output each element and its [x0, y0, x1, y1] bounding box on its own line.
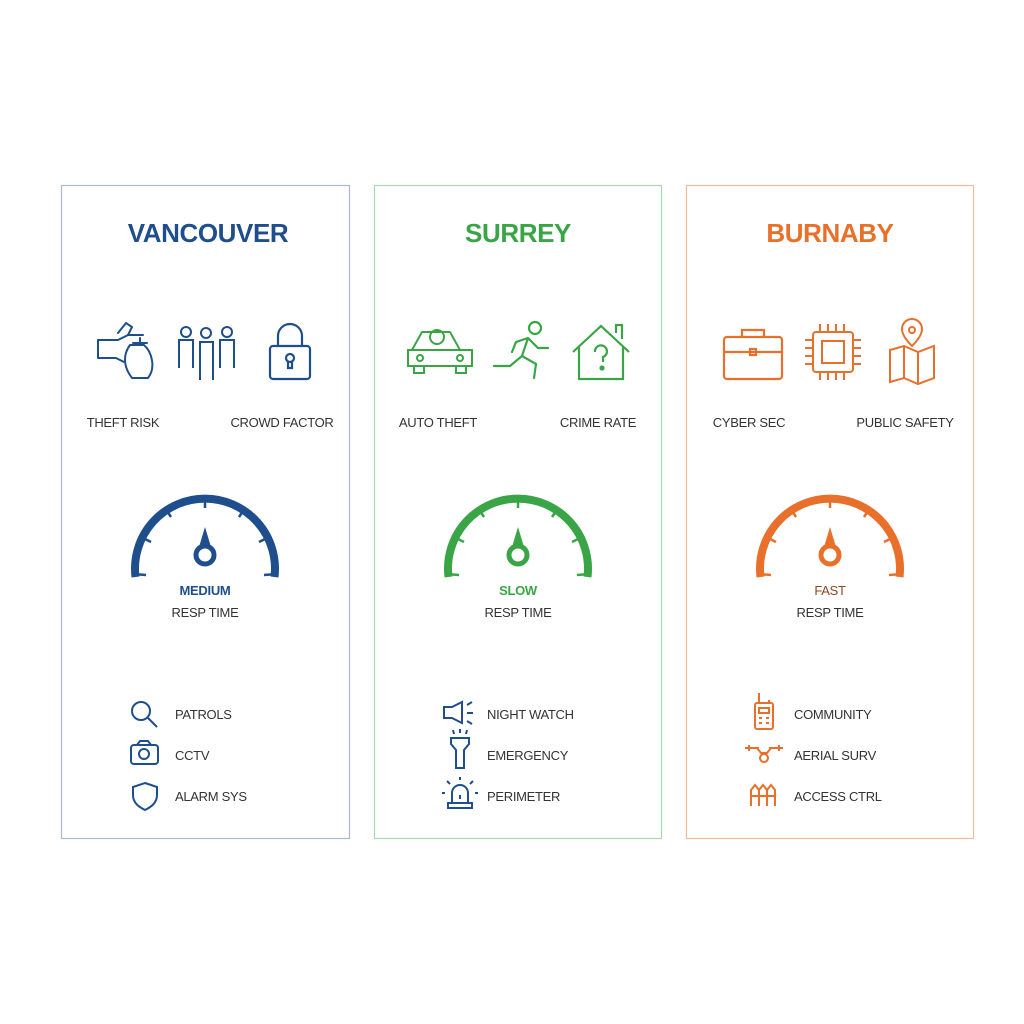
label: cyber sec: CYBER SEC — [713, 415, 785, 430]
gauge: slow — [446, 497, 590, 620]
gauge: fast: RESP TIME — [797, 605, 864, 620]
icon: briefcase — [724, 330, 782, 379]
list: vancouver measures: PATROLS — [175, 707, 232, 722]
icon: running person — [494, 322, 548, 378]
panel: vancouver — [62, 186, 350, 838]
list: burnaby measures: COMMUNITY — [794, 707, 872, 722]
title: surrey: SURREY — [465, 218, 571, 248]
icon: crowd — [179, 327, 234, 380]
list: surrey measures: EMERGENCY — [487, 748, 569, 763]
label: theft risk: THEFT RISK — [87, 415, 160, 430]
gauge: slow: SLOW — [499, 583, 538, 598]
label: crime rate: CRIME RATE — [560, 415, 637, 430]
panel: burnaby — [686, 186, 974, 838]
list: burnaby measures: AERIAL SURV — [794, 748, 877, 763]
gauge: medium: RESP TIME — [172, 605, 239, 620]
list: burnaby measures — [745, 693, 882, 806]
label: auto theft: AUTO THEFT — [399, 415, 477, 430]
icon: chip — [805, 324, 861, 380]
gauge: fast: FAST — [814, 583, 846, 598]
list: surrey measures: PERIMETER — [487, 789, 560, 804]
title: vancouver: VANCOUVER — [128, 218, 289, 248]
icon: map pin — [890, 319, 934, 384]
list: vancouver measures — [131, 702, 247, 810]
list: vancouver measures: ALARM SYS — [175, 789, 247, 804]
icon: padlock — [270, 324, 310, 379]
gauge: fast — [758, 497, 902, 620]
panel: surrey — [374, 186, 662, 838]
gauge: medium — [133, 497, 277, 620]
list: surrey measures: NIGHT WATCH — [487, 707, 574, 722]
icon: theft hand with bag — [98, 323, 152, 378]
list: burnaby measures: ACCESS CTRL — [794, 789, 882, 804]
icon: house question — [573, 325, 629, 379]
gauge: medium: MEDIUM — [180, 583, 230, 598]
list: surrey measures — [442, 702, 574, 808]
label: public safety: PUBLIC SAFETY — [856, 415, 954, 430]
title: burnaby: BURNABY — [766, 218, 894, 248]
label: crowd factor: CROWD FACTOR — [230, 415, 334, 430]
icon: car — [408, 330, 472, 373]
list: vancouver measures: CCTV — [175, 748, 210, 763]
gauge: slow: RESP TIME — [485, 605, 552, 620]
